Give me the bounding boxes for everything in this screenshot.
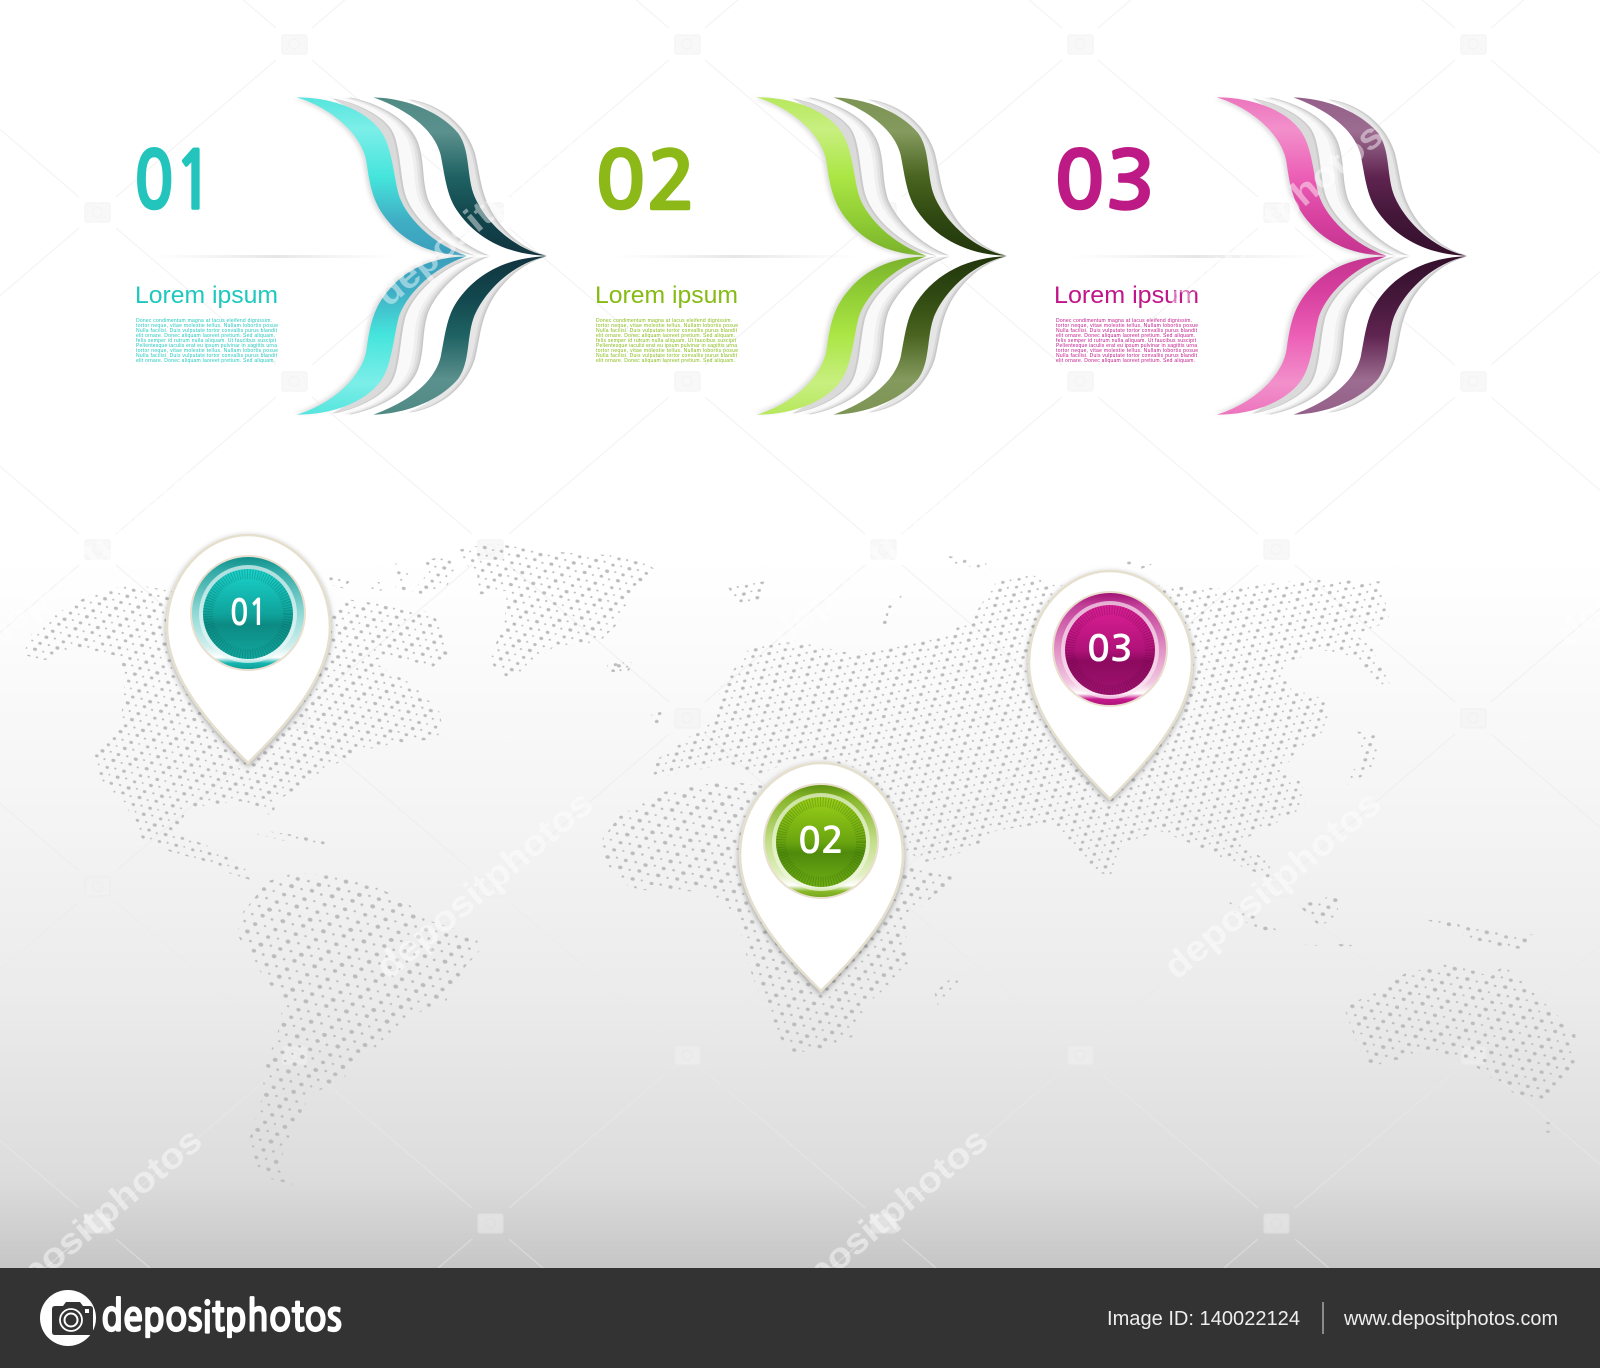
body text [1056, 318, 1198, 364]
brand name: depositphotos [101, 1297, 342, 1338]
world map dots [20, 543, 1575, 1185]
Madagascar [935, 967, 964, 1010]
body text: tortor neque, vitae molestie tellus. Nullam lobortis posue [596, 323, 738, 329]
map: Americas and Greenland [20, 543, 658, 1185]
body text: elit ornare. Donec aliquam laoreet pretium. Sed aliquam. [1056, 358, 1195, 364]
diagonal watermarks: depositphotos [1155, 782, 1389, 987]
website url: www.depositphotos.com [1343, 1307, 1558, 1330]
body text: Pellentesque iaculis erat eu ipsum pulvinar in sagittis urna [1056, 343, 1197, 349]
body text: felis semper id rutrum nulla aliquam. Ut faucibus suscipit [136, 338, 277, 344]
body text: elit ornare. Donec aliquam laoreet pretium. Sed aliquam. [1056, 333, 1195, 339]
pin number 03: 03 [1087, 632, 1133, 667]
Eurasia [652, 573, 1392, 878]
footer bar [0, 1268, 1600, 1368]
body text: Pellentesque iaculis erat eu ipsum pulvinar in sagittis urna [136, 343, 277, 349]
diagonal watermarks: depositphotos [1157, 114, 1391, 319]
body text: Nulla facilisi. Duis vulputate tortor convallis purus blandit [1056, 328, 1198, 334]
body text: Pellentesque iaculis erat eu ipsum pulvinar in sagittis urna [596, 343, 737, 349]
body text: Nulla facilisi. Duis vulputate tortor convallis purus blandit [596, 328, 738, 334]
Greenland [460, 543, 658, 682]
map: Eurasia, Africa, Australia [600, 556, 1575, 1133]
panel: step 02 [595, 97, 1008, 415]
body text: tortor neque, vitae molestie tellus. Nullam lobortis posue [136, 348, 278, 354]
body text: elit ornare. Donec aliquam laoreet pretium. Sed aliquam. [136, 358, 275, 364]
footer separator [1322, 1302, 1324, 1334]
panel: step 01 [134, 97, 548, 415]
step number 01: 01 [134, 142, 214, 221]
pin number 01: 01 [230, 596, 267, 631]
body text [136, 318, 278, 364]
icon: camera logo [40, 1290, 96, 1346]
South America [237, 873, 489, 1185]
map pin 02 [740, 763, 903, 991]
diagonal watermarks: depositphotos [762, 1119, 996, 1324]
map pin 01 [167, 535, 330, 763]
Indonesia and New Guinea [1221, 894, 1536, 949]
arrow: lower ribbons [1214, 255, 1468, 415]
Northern islands [606, 556, 1159, 724]
heading: Lorem ipsum [135, 282, 278, 309]
body text: Nulla facilisi. Duis vulputate tortor convallis purus blandit [136, 353, 278, 359]
Australia [1344, 963, 1575, 1099]
arrow: lower ribbons [294, 255, 548, 415]
image id: Image ID: 140022124 [1107, 1307, 1300, 1330]
arrow: lower ribbons [754, 255, 1008, 415]
body text: Donec condimentum magna at lacus eleifend dignissim. [596, 318, 732, 324]
body text: tortor neque, vitae molestie tellus. Nullam lobortis posue [136, 323, 278, 329]
diagonal watermarks: depositphotos [762, 450, 996, 655]
divider line [150, 255, 400, 258]
step number 03: 03 [1054, 142, 1156, 221]
body text: Nulla facilisi. Duis vulputate tortor convallis purus blandit [596, 353, 738, 359]
panel: step 03 [1054, 97, 1468, 415]
arrow: upper ribbons [1214, 97, 1468, 257]
Japan and Kuriles [1344, 732, 1377, 785]
Africa [600, 781, 961, 1052]
body text: elit ornare. Donec aliquam laoreet pretium. Sed aliquam. [136, 333, 275, 339]
heading: Lorem ipsum [595, 282, 738, 309]
body text: Nulla facilisi. Duis vulputate tortor convallis purus blandit [136, 328, 278, 334]
arrow: upper ribbons [754, 97, 1008, 257]
body text: Donec condimentum magna at lacus eleifend dignissim. [136, 318, 272, 324]
body text: elit ornare. Donec aliquam laoreet pretium. Sed aliquam. [596, 333, 735, 339]
North America [20, 584, 451, 881]
body text: felis semper id rutrum nulla aliquam. Ut faucibus suscipit [1056, 338, 1197, 344]
Tasmania [1546, 1122, 1550, 1133]
divider line [1070, 255, 1320, 258]
body text: Donec condimentum magna at lacus eleifend dignissim. [1056, 318, 1192, 324]
body text: elit ornare. Donec aliquam laoreet pretium. Sed aliquam. [596, 358, 735, 364]
Arctic islands [254, 554, 455, 847]
diagonal watermarks: depositphotos [367, 782, 601, 987]
diagonal watermarks: depositphotos [367, 109, 601, 314]
body text: Nulla facilisi. Duis vulputate tortor convallis purus blandit [1056, 353, 1198, 359]
divider line [610, 255, 860, 258]
body text: tortor neque, vitae molestie tellus. Nullam lobortis posue [1056, 348, 1198, 354]
pin number 02: 02 [798, 824, 844, 859]
arrow: upper ribbons [294, 97, 548, 257]
body text: tortor neque, vitae molestie tellus. Nullam lobortis posue [596, 348, 738, 354]
step number 02: 02 [595, 142, 697, 221]
heading: Lorem ipsum [1054, 282, 1199, 309]
body text: felis semper id rutrum nulla aliquam. Ut faucibus suscipit [596, 338, 737, 344]
Iceland [606, 661, 632, 672]
map pin 03 [1029, 571, 1192, 799]
body text: tortor neque, vitae molestie tellus. Nullam lobortis posue [1056, 323, 1198, 329]
body text [596, 318, 738, 364]
